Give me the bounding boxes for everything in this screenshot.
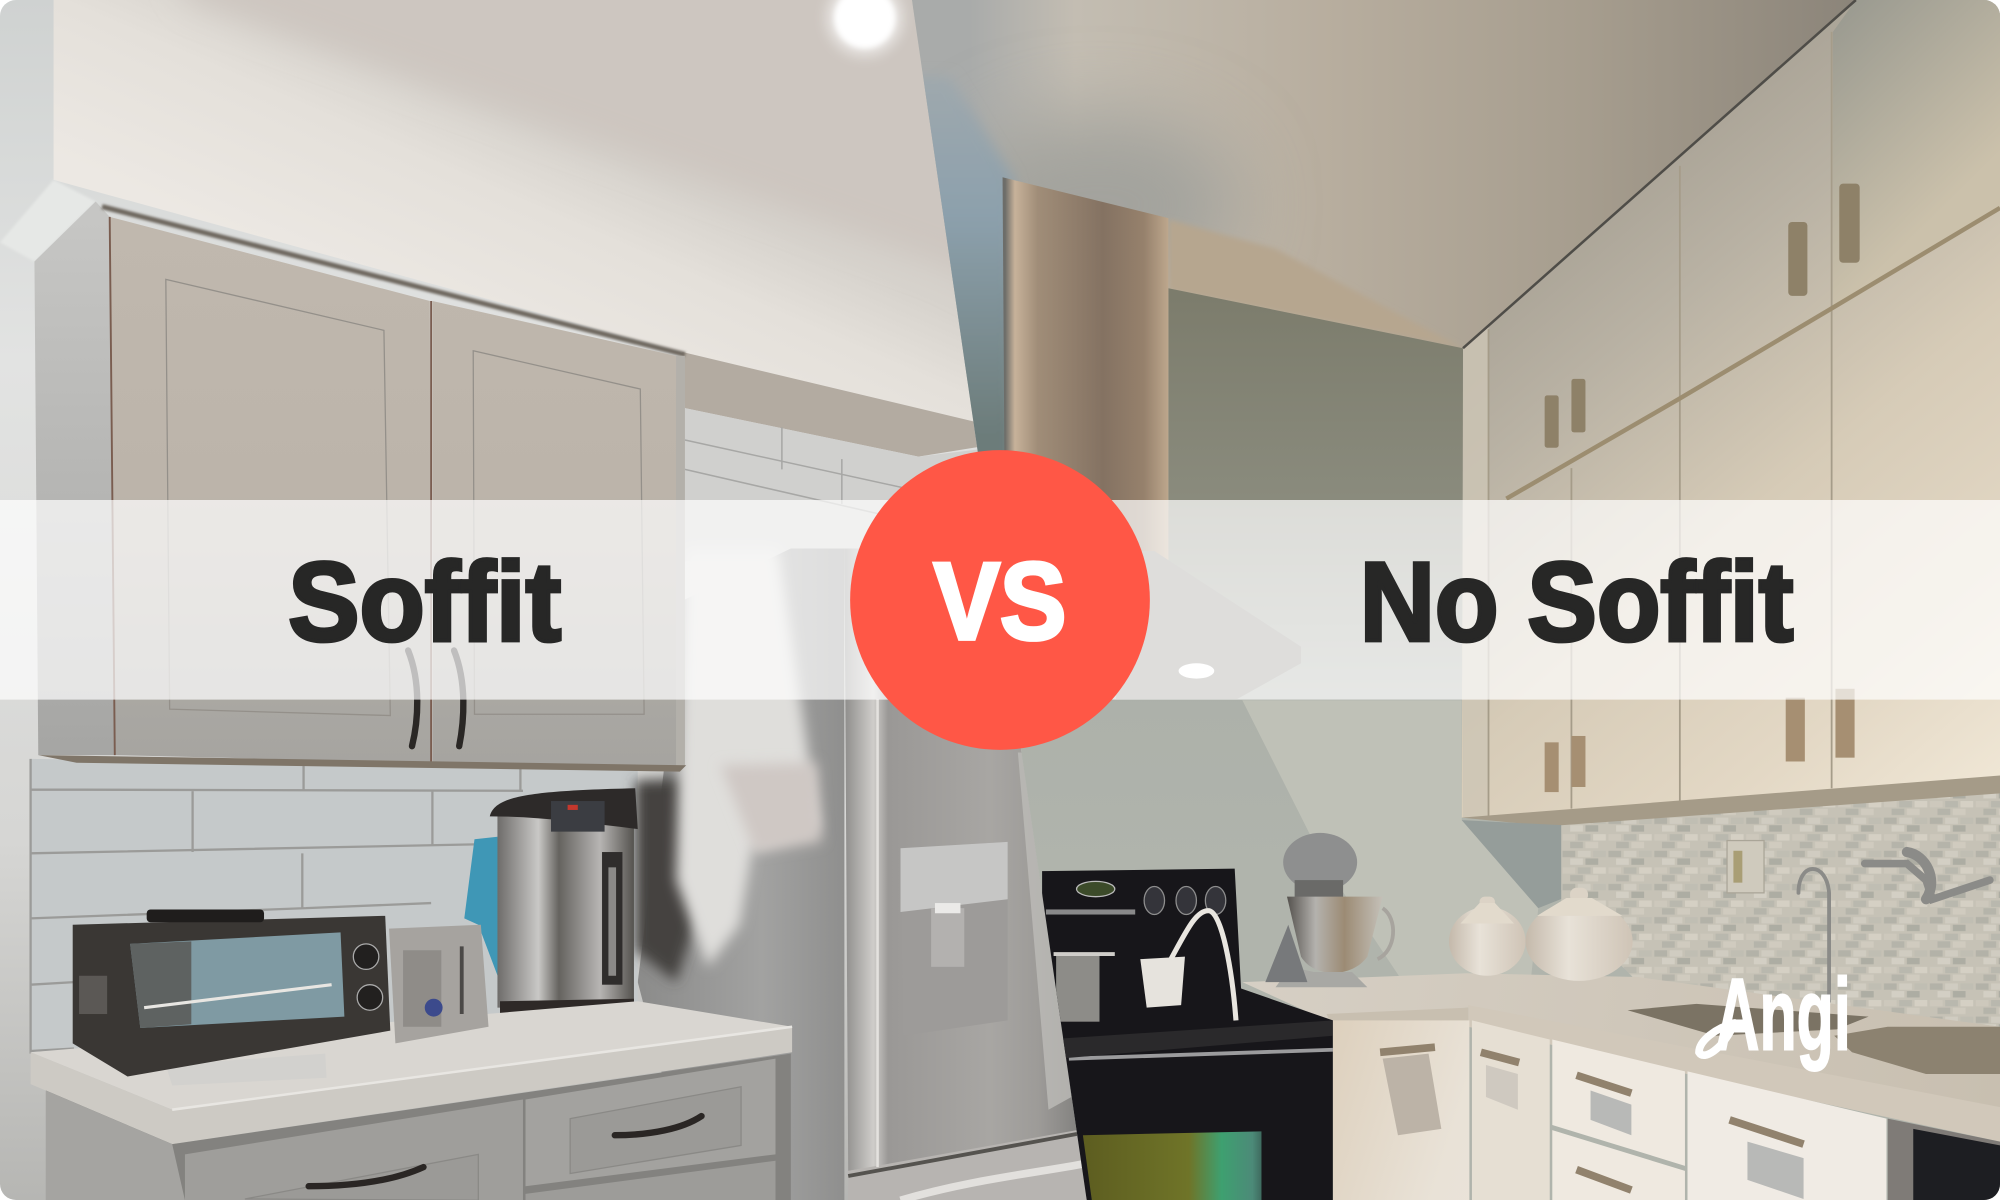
wall faucet <box>1798 852 1990 1001</box>
ceiling <box>200 0 950 264</box>
beige wall top <box>1168 221 1434 338</box>
Angi logo <box>1699 958 1851 1072</box>
airpot <box>490 788 638 1027</box>
upper cabinet pulls <box>1545 184 1860 792</box>
VS badge: VS <box>934 541 1066 663</box>
heading: Soffit: Soffit <box>288 538 561 664</box>
heading: No Soffit: No Soffit <box>1360 538 1793 664</box>
Angi logo: Angi <box>1716 958 1851 1072</box>
range hood canopy <box>1116 551 1301 699</box>
outlet plate <box>1727 841 1764 893</box>
left photo: kitchen with soffit <box>0 0 1097 1200</box>
translucent title band <box>0 500 2000 700</box>
upper tiles <box>685 408 978 514</box>
water dispenser <box>901 842 1008 1036</box>
lit wall area <box>1242 700 1538 982</box>
upper cabinet side <box>34 202 115 755</box>
ceramic jars <box>1449 888 1633 981</box>
countertop <box>31 1001 792 1144</box>
electric stove <box>1042 869 1333 1200</box>
blurred fridge magnets and papers <box>635 548 821 982</box>
fridge side panel <box>638 548 844 1200</box>
dishwasher <box>1888 1119 2000 1200</box>
lower cabinets <box>1333 1020 1886 1200</box>
blue towel <box>464 836 498 976</box>
back wall <box>1021 288 1463 818</box>
upper cabinet doors <box>38 207 686 772</box>
white utensil holder <box>1140 911 1236 1020</box>
shadow wedge <box>1462 820 1564 908</box>
soffit left return <box>0 180 96 261</box>
ceiling shade near chimney <box>1006 94 1244 259</box>
right photo: kitchen without soffit <box>893 0 2000 1200</box>
recessed ceiling light <box>827 0 903 56</box>
soffit wall <box>54 0 982 423</box>
toaster <box>389 925 489 1043</box>
range hood chimney <box>1003 177 1168 561</box>
toaster oven <box>73 909 390 1077</box>
mosaic backsplash <box>1561 793 2000 1027</box>
countertop <box>1242 973 2000 1142</box>
VS badge <box>850 450 1150 750</box>
sink <box>1628 1004 2000 1074</box>
steel pot <box>1054 953 1115 1022</box>
stand mixer <box>1265 833 1393 987</box>
soffit underside <box>682 352 982 457</box>
backsplash tiles <box>31 759 638 1054</box>
cabinet handles <box>408 651 463 746</box>
lower left cabinets <box>46 1054 791 1200</box>
fridge door <box>844 548 1097 1200</box>
side strip behind chimney <box>924 80 1014 452</box>
upper cabinets <box>1462 0 2000 828</box>
ceiling <box>912 0 1862 383</box>
